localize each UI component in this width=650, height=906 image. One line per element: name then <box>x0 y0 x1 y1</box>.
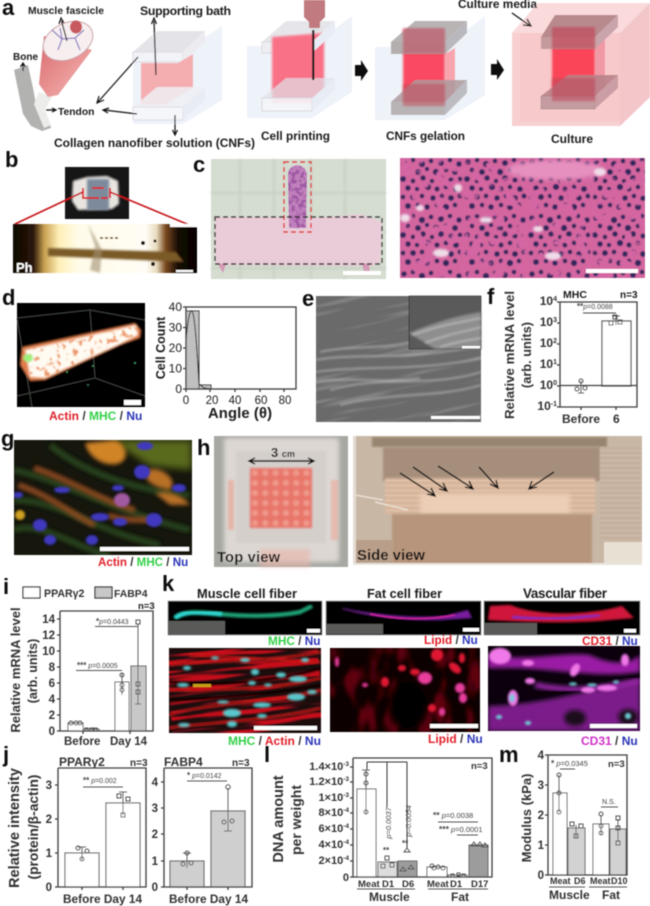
tick labels: 3 <box>553 317 557 324</box>
strip legends: MHC / Nu <box>268 634 320 648</box>
channel legend: Actin / MHC / Nu <box>98 556 188 569</box>
histogram chart <box>154 300 296 422</box>
tick labels: 2×10 <box>318 855 343 867</box>
x labels: Before <box>562 412 600 426</box>
axis titles: DNA amount <box>271 775 287 863</box>
panel i: adipogenic mRNA chart: Day 14 <box>110 736 148 748</box>
tick labels: -4 <box>343 839 349 846</box>
cell printing label: Cell printing <box>261 129 330 143</box>
arrow: to collagen label <box>172 115 178 135</box>
axes and baseline <box>557 302 637 410</box>
tick labels: 0 <box>49 726 55 738</box>
tick labels: -4 <box>343 807 349 814</box>
axis titles: Relative mRNA level <box>502 291 517 419</box>
sample size: n=3 <box>138 601 155 612</box>
chart: PPARγ2: 2 <box>46 814 52 826</box>
fat fiber strip <box>326 601 481 635</box>
sample size: n=3 <box>471 761 488 772</box>
panel f: MHC mRNA chart <box>487 284 638 426</box>
tick labels: 10 <box>42 646 55 658</box>
sample size: n=3 <box>620 290 638 301</box>
tick labels <box>42 614 56 738</box>
fat p values: *** p=0.0001 <box>439 824 483 834</box>
y axis title: Modulus (kPa) <box>519 774 534 862</box>
arrow: bone <box>20 63 26 71</box>
p value: * p=0.0345 <box>551 758 588 768</box>
scale bar <box>343 271 381 275</box>
MHC title: MHC <box>563 289 587 301</box>
tick labels: -3 <box>343 776 349 783</box>
tick labels: 4×10 <box>318 839 343 851</box>
tick labels: -1 <box>551 401 557 408</box>
panel letter l: l <box>264 742 270 767</box>
top view label: Top view <box>217 550 281 566</box>
histogram chart: Angle (θ) <box>208 406 272 422</box>
x labels: Meat <box>427 879 449 890</box>
panel l: DNA amount chart <box>264 742 492 904</box>
supporting bath label: Supporting bath <box>140 4 231 18</box>
tick labels: -3 <box>343 792 349 799</box>
histogram chart: 20 <box>206 395 218 407</box>
tick labels: 6×10 <box>318 823 343 835</box>
muscle fiber strip <box>168 601 322 635</box>
rotated p values: p=0.0054 <box>404 805 413 838</box>
chart: PPARγ2: PPARγ2 <box>59 755 105 769</box>
side view label: Side view <box>357 548 425 564</box>
data points <box>362 770 488 877</box>
chart: FABP4: Before Day 14 <box>169 892 248 906</box>
tick labels: 2 <box>553 338 557 345</box>
tick labels: 10 <box>540 336 553 350</box>
arrow: muscle fascicle <box>59 18 67 41</box>
side view photo <box>353 436 642 565</box>
error bars and points <box>575 315 622 393</box>
tick labels: 10 <box>540 357 553 371</box>
panel letter d: d <box>2 285 15 310</box>
top view photo <box>214 436 348 567</box>
histogram chart: Cell Count <box>154 316 168 379</box>
panel letter e: e <box>302 286 314 311</box>
tick labels: 1 <box>553 359 557 366</box>
histogram chart: 0 <box>183 395 189 407</box>
chart: PPARγ2: ** p=0.002 <box>83 776 117 785</box>
tick labels: 0 <box>343 872 349 884</box>
vascular fiber strip <box>484 601 640 635</box>
strip legends: CD31 / Nu <box>582 634 638 648</box>
panel m: modulus chart: Fat <box>602 888 620 902</box>
not significant: N.S. <box>602 799 616 806</box>
collagen label: Collagen nanofiber solution (CNFs) <box>54 136 255 150</box>
arrow: to tendon from top plate <box>97 57 138 103</box>
panel letter h: h <box>197 435 210 460</box>
arrow: to tendon from bottom plate <box>103 108 137 114</box>
x labels: D1 <box>450 879 463 890</box>
chart: PPARγ2: n=3 <box>130 758 148 769</box>
histogram chart: 80 <box>279 395 291 407</box>
tick labels: 4 <box>538 750 545 762</box>
chart: PPARγ2: 3 <box>46 780 52 792</box>
tick labels: 4 <box>553 296 557 303</box>
panel j: protein intensity charts <box>2 742 252 906</box>
phase contrast photo <box>13 224 197 273</box>
muscle confocal image <box>168 647 322 734</box>
tick labels: 2 <box>49 710 55 722</box>
arrows pointing to fibers <box>400 466 554 496</box>
tick labels: 2 <box>538 810 544 822</box>
x labels: D6 <box>574 876 586 886</box>
error bars and points <box>69 620 141 731</box>
chart: FABP4: 2 <box>152 829 158 841</box>
panel k: fiber immunostaining <box>162 571 640 748</box>
x labels: D10 <box>611 876 628 886</box>
tick labels <box>309 761 349 884</box>
tick labels <box>537 294 557 413</box>
fat p values <box>433 810 483 835</box>
sample size: n=3 <box>608 759 625 770</box>
muscle image legend: MHC / Actin / Nu <box>228 734 321 748</box>
x labels: Meat <box>358 879 380 890</box>
tick labels: -3 <box>343 761 349 768</box>
scale bar <box>586 269 638 273</box>
panel c: histology <box>193 152 645 279</box>
tick labels: -4 <box>343 855 349 862</box>
legend: FABP4 <box>114 589 148 600</box>
dimension arrow <box>249 458 314 464</box>
icon: muscle <box>39 36 92 97</box>
tick labels: 14 <box>42 614 56 626</box>
panel f: MHC mRNA chart: 6 <box>613 412 620 426</box>
arrow: to gelation <box>355 60 368 81</box>
vascular confocal image <box>488 646 640 731</box>
tick labels: 10 <box>540 378 553 392</box>
x labels <box>358 879 488 890</box>
supporting bath cube <box>133 26 222 124</box>
red zoom lines <box>15 192 194 227</box>
axis titles: Relative mRNA level <box>8 607 23 733</box>
rotated p values: ** <box>402 839 409 848</box>
panel letter i: i <box>3 574 9 599</box>
bars <box>357 789 488 877</box>
SEM micrograph <box>315 295 482 423</box>
p value: 0.0443: *p=0.0443 <box>96 617 129 626</box>
panel letter b: b <box>5 147 18 172</box>
tick labels: 8 <box>49 662 56 674</box>
axes <box>57 611 153 734</box>
significance bracket <box>367 762 407 848</box>
panel a: bioprinting workflow <box>2 0 650 150</box>
tick labels: 8×10 <box>318 807 343 819</box>
column titles <box>197 586 608 601</box>
panel letter f: f <box>487 284 495 309</box>
panel e: SEM <box>302 293 483 423</box>
tick labels: 3 <box>538 780 544 792</box>
x labels: Meat <box>550 876 571 886</box>
panel letter c: c <box>193 152 205 177</box>
panel j: protein intensity charts: (protein/β-actin) <box>26 774 41 880</box>
panel i: adipogenic mRNA chart <box>3 574 155 748</box>
x labels: D17 <box>471 879 488 890</box>
axes <box>545 755 627 875</box>
panel b: printed construct and phase image <box>5 147 197 275</box>
panel letter k: k <box>162 571 175 596</box>
column titles: Fat cell fiber <box>367 587 442 601</box>
stained construct on grid <box>211 159 386 279</box>
y axis titles: Relative intensity <box>7 767 23 888</box>
chart: FABP4: FABP4 <box>164 755 203 769</box>
panel d: fluorescence and alignment histogram <box>2 285 296 423</box>
histogram chart: 40 <box>169 300 182 314</box>
legend <box>23 587 148 600</box>
rotated p values: p=0.0037 <box>384 806 393 840</box>
chart: FABP4: * p=0.0142 <box>187 771 222 780</box>
chart: PPARγ2: Before Day 14 <box>63 892 142 906</box>
panel f: MHC mRNA chart: (arb. units) <box>519 322 534 388</box>
tick labels <box>538 750 545 882</box>
chart: PPARγ2: 0 <box>46 882 52 894</box>
tick labels: 4 <box>49 694 56 706</box>
column titles: Vascular fiber <box>523 586 608 601</box>
panel h: printed construct photos <box>197 435 642 567</box>
legend: PPARγ2 <box>44 588 85 600</box>
confocal image <box>13 440 192 555</box>
tick labels: 1.2×10 <box>309 776 343 788</box>
tendon label: Tendon <box>58 107 94 118</box>
panel g: confocal detail <box>1 426 192 569</box>
printing nozzle <box>304 0 325 80</box>
panel letter j: j <box>2 742 9 767</box>
histogram chart: 60 <box>255 395 267 407</box>
vascular image legend: CD31 / Nu <box>581 734 638 748</box>
icon: tendon <box>34 92 52 128</box>
panel m: modulus chart <box>499 742 628 902</box>
axes <box>350 758 492 877</box>
construct photo <box>65 167 129 219</box>
strip legends: Lipid / Nu <box>424 633 478 647</box>
panel letter g: g <box>1 426 14 451</box>
arrow: to culture <box>491 59 504 80</box>
muscle fascicle label: Muscle fascicle <box>28 6 104 17</box>
chart: PPARγ2 <box>46 755 148 906</box>
cell printing cube <box>247 16 352 118</box>
bars <box>553 793 626 875</box>
tick labels: 10 <box>540 315 553 329</box>
tick labels: 12 <box>42 630 55 642</box>
tick labels: 1 <box>538 840 545 852</box>
rotated p values <box>383 805 413 855</box>
panel l: DNA amount chart: Fat <box>451 890 469 904</box>
bone label: Bone <box>13 52 38 63</box>
chart: FABP4: 0 <box>152 882 158 894</box>
group labels: Muscle <box>369 890 410 904</box>
tick labels: 10 <box>540 294 553 308</box>
arrow: supporting bath <box>152 18 156 75</box>
tick labels: 0 <box>553 380 557 387</box>
histogram chart: 30 <box>169 320 182 334</box>
p value: **p=0.0088 <box>577 302 613 311</box>
tick labels: 10 <box>537 399 551 413</box>
histogram chart: 0 <box>175 382 182 396</box>
3D confocal fiber image <box>17 303 145 407</box>
icon: muscle cross section with fascicles <box>37 14 99 68</box>
chart: FABP4: 1 <box>152 856 159 868</box>
channel legend: Actin / MHC / Nu <box>49 409 142 423</box>
x labels: D6 <box>402 879 414 890</box>
arrow: tendon left <box>46 108 56 112</box>
x labels: D1 <box>382 879 395 890</box>
panel i: adipogenic mRNA chart: (arb. units) <box>26 639 40 703</box>
histogram chart: 40 <box>229 395 241 407</box>
bars <box>68 666 146 731</box>
column titles: Muscle cell fiber <box>197 586 297 601</box>
chart: PPARγ2: 1 <box>46 848 53 860</box>
tick labels: 0 <box>538 870 544 882</box>
culture label: Culture <box>551 132 593 146</box>
scale bar <box>176 270 193 272</box>
fat p values: ** p=0.0038 <box>433 810 473 820</box>
gelation cube <box>375 16 485 120</box>
histogram chart: 10 <box>169 362 182 376</box>
panel letter m: m <box>499 742 519 767</box>
p value: 0.0005: *** p=0.0005 <box>77 661 118 670</box>
fat image legend: Lipid / Nu <box>428 732 483 746</box>
panel l: DNA amount chart: per weight <box>288 785 304 855</box>
SEM inset <box>409 296 481 349</box>
tick labels: 6 <box>49 678 55 690</box>
Ph label: Ph <box>16 260 33 275</box>
x labels: Before <box>64 736 100 748</box>
chart: FABP4: n=3 <box>232 758 250 769</box>
gelation label: CNFs gelation <box>386 129 465 143</box>
red selection marks <box>83 188 110 198</box>
x labels <box>550 876 628 886</box>
culture cube <box>512 3 650 126</box>
rotated p values: ** <box>383 846 390 855</box>
group labels: Muscle <box>549 888 590 902</box>
icon: bone <box>14 65 51 131</box>
data points <box>557 773 620 845</box>
histogram chart: 20 <box>169 341 182 355</box>
tick labels: 1×10 <box>318 792 343 804</box>
H&E micrograph <box>400 158 645 278</box>
bar 6 <box>602 321 631 386</box>
3 cm label: 3 cm <box>271 445 295 460</box>
chart: FABP4: 3 <box>152 803 158 815</box>
fat confocal image <box>330 648 480 732</box>
chart: FABP4: 4 <box>152 777 159 789</box>
x labels: Meat <box>590 876 611 886</box>
tick labels: -4 <box>343 823 349 830</box>
arrow: culture media <box>512 13 531 26</box>
tick labels: 1.4×10 <box>309 761 343 773</box>
strip legends <box>268 633 638 648</box>
red dashed box <box>284 162 311 232</box>
black dashed box <box>215 217 382 264</box>
chart: FABP4 <box>152 755 252 906</box>
